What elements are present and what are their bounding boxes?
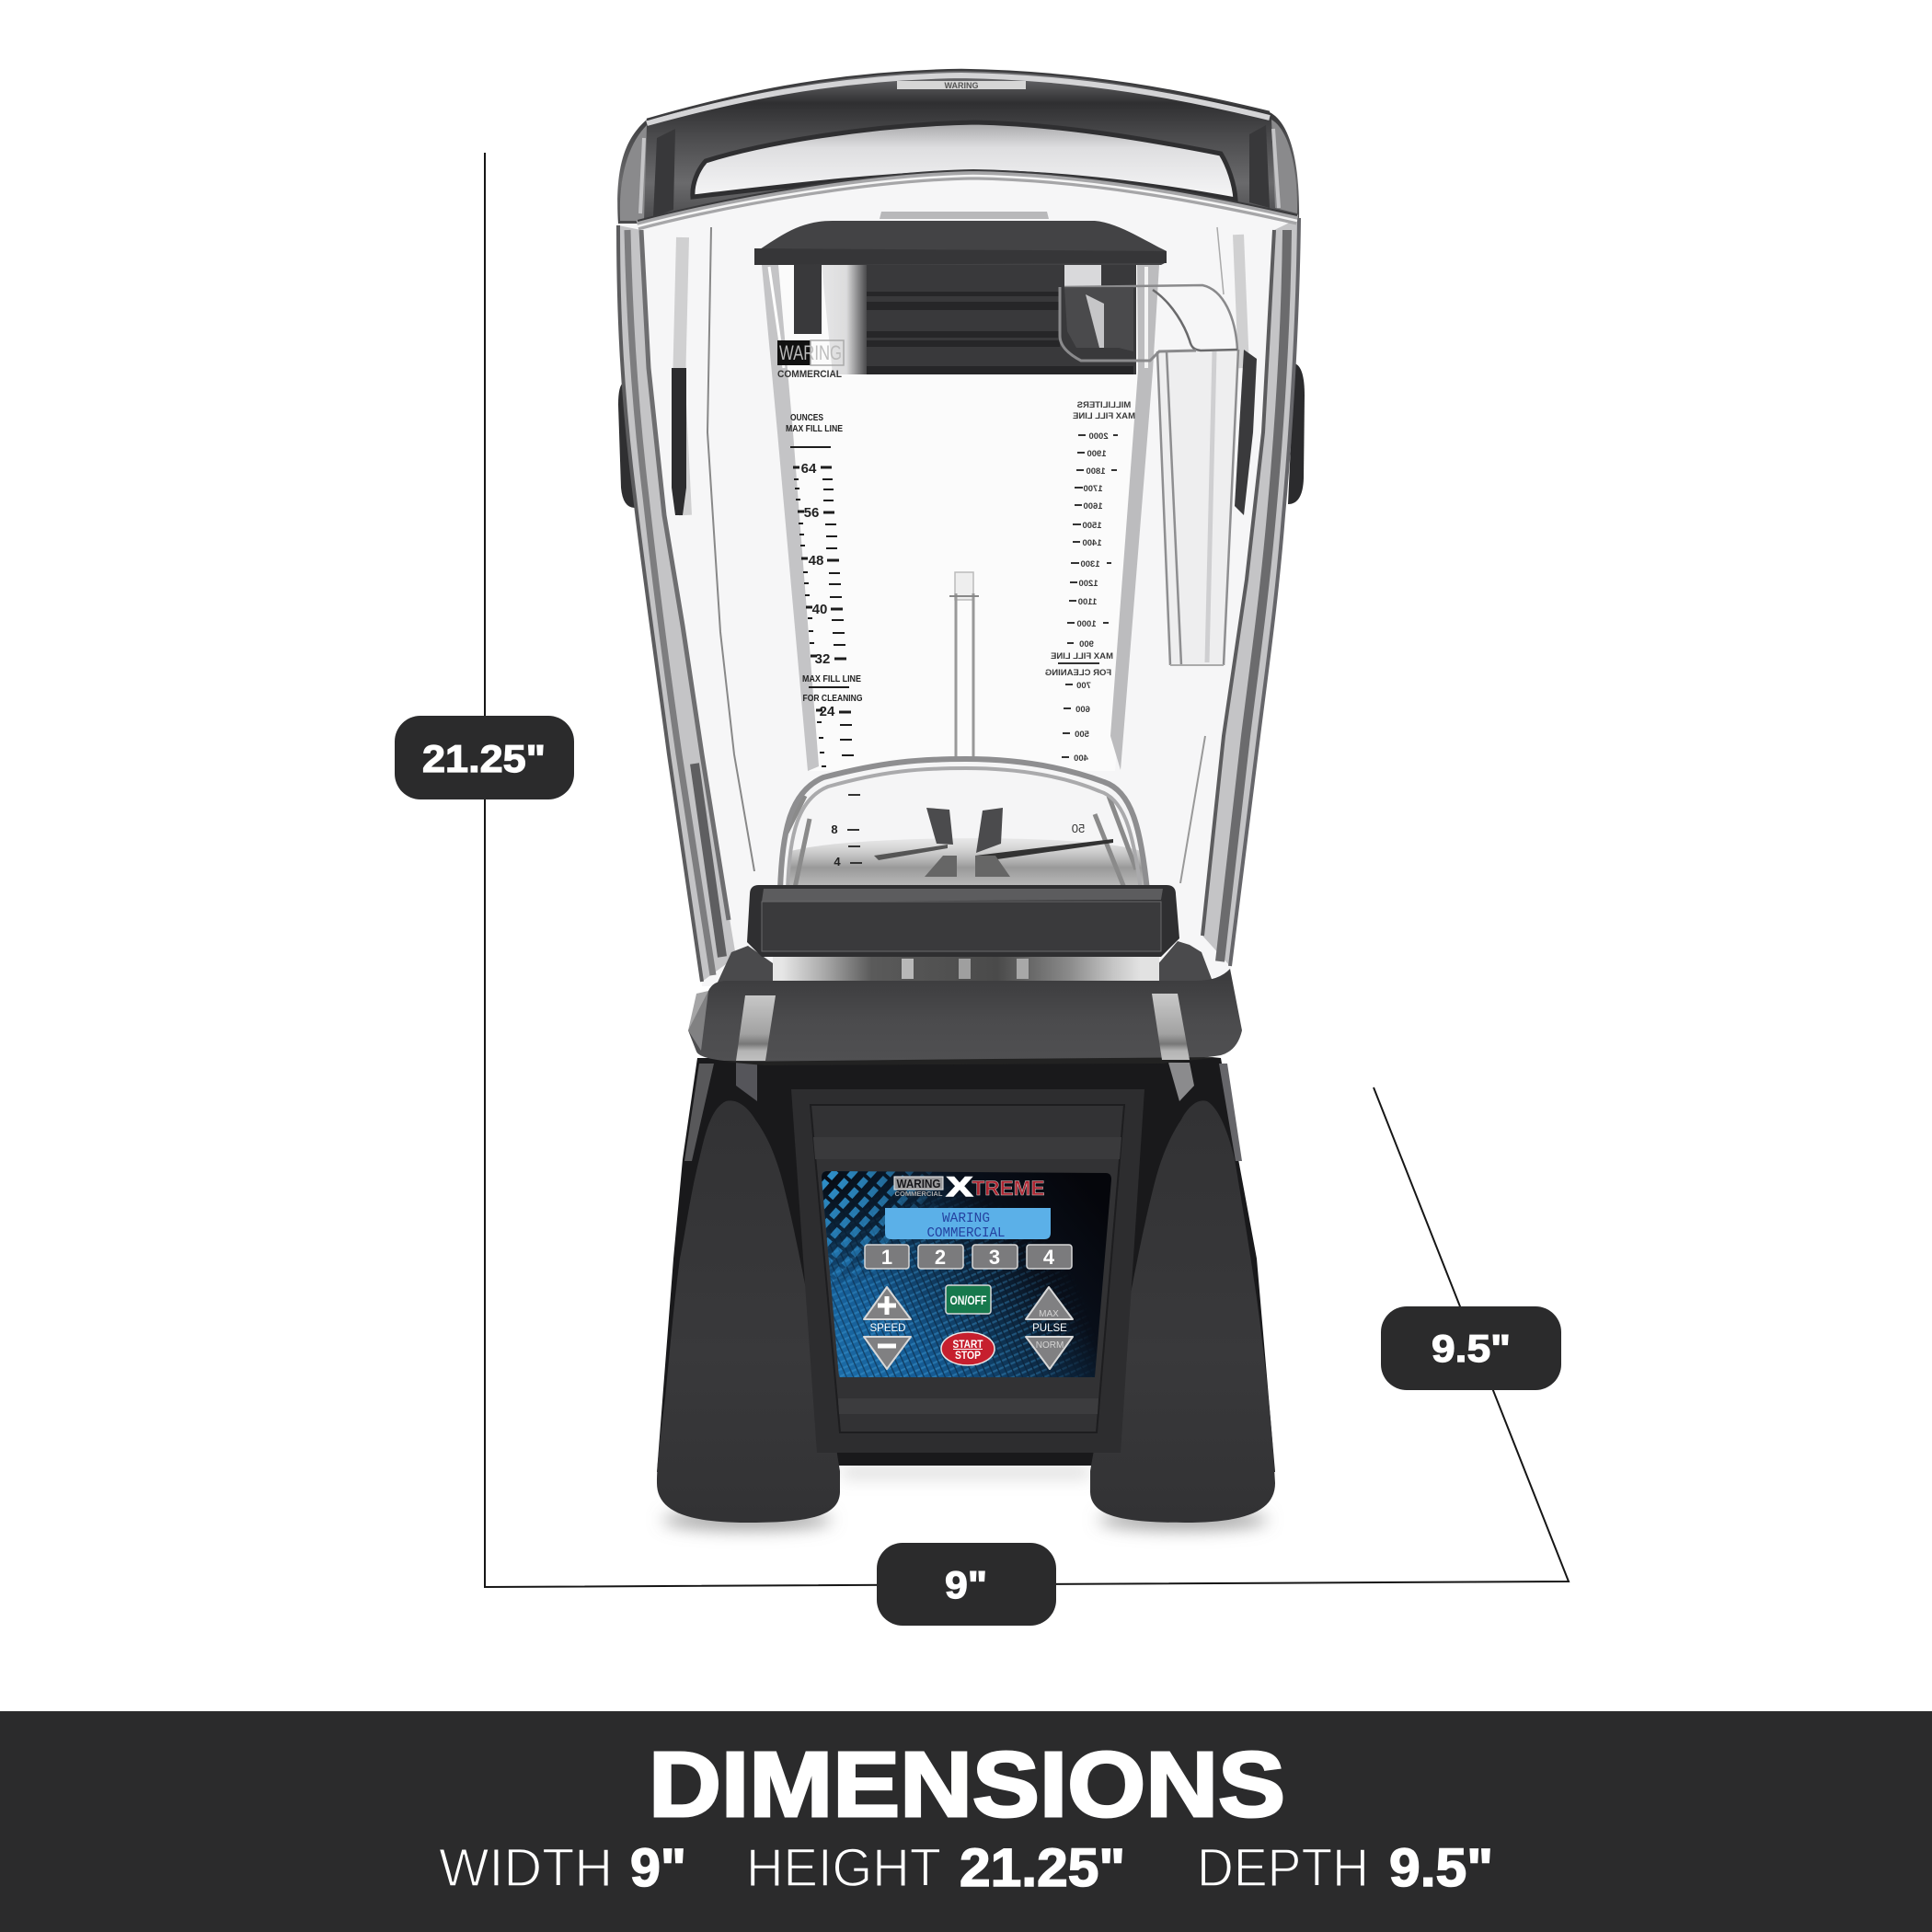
ounces scale: 40 [812,602,827,617]
left foot [657,1100,840,1523]
preset buttons 1 to 4: 4 [1043,1246,1055,1269]
milliliters scale (mirrored, seen through the jar): 1700 [1083,484,1103,494]
milliliters scale (mirrored, seen through the jar): 700 [1076,681,1091,691]
jar base pad [747,885,1179,957]
left side band of shell [618,225,736,982]
brand logo: WARING [896,1177,940,1190]
right bracket in shell [1235,350,1257,515]
side knob left [618,383,635,508]
ounces scale: 64 [801,461,817,477]
milliliters scale (mirrored, seen through the jar): MAX FILL LINE [1073,411,1135,421]
side knob right [1288,363,1305,504]
ounces scale: FOR CLEANING [802,693,863,704]
ounces scale: OUNCES [790,412,823,423]
milliliters scale (mirrored, seen through the jar): 400 [1074,753,1088,764]
lid corner highlights [640,129,1279,213]
milliliters scale (mirrored, seen through the jar): 1300 [1080,559,1100,569]
PULSE controls: MAX [1039,1309,1059,1319]
milliliters scale (mirrored, seen through the jar): MAX FILL LINE [1051,651,1113,661]
milliliters scale (mirrored, seen through the jar): 1500 [1082,521,1102,531]
milliliters scale (mirrored, seen through the jar): 1800 [1086,466,1106,477]
lid rim [638,175,1297,225]
milliliters scale (mirrored, seen through the jar): 600 [1075,705,1090,715]
brand logo: COMMERCIAL [894,1191,943,1198]
enclosure lid with window [617,70,1299,226]
preset buttons 1 to 4: 1 [881,1246,892,1269]
width spec: WIDTH [439,1838,613,1898]
SPEED controls [864,1287,911,1369]
blending enclosure: clear outer shell [616,70,1305,986]
ounces scale: 24 [820,704,835,719]
lid window [693,122,1236,200]
blade shaft [949,572,979,883]
LCD display [885,1208,1051,1241]
height label pill [395,716,574,799]
milliliters scale (mirrored, seen through the jar): 500 [1075,730,1089,740]
height spec: HEIGHT [746,1838,941,1898]
ounces scale [786,412,863,719]
blender jar [754,212,1238,891]
black base body [657,1058,1275,1523]
milliliters scale (mirrored, seen through the jar): MILLILITERS [1077,400,1131,410]
milliliters scale (mirrored, seen through the jar): 1900 [1087,449,1107,459]
gap below jar pad [773,952,1159,982]
dark wedge left of jar pad [716,946,791,986]
lid label plate [897,81,1026,89]
depth label pill [1381,1306,1561,1390]
ounces scale: MAX FILL LINE [802,673,861,684]
width label pill [877,1543,1056,1626]
brand logo: X [947,1172,972,1202]
brand logo [894,1172,1045,1202]
milliliters scale (mirrored, seen through the jar): FOR CLEANING [1045,668,1111,678]
dimension lines: height, width and depth [485,153,1569,1587]
metric mark at jar base: 50 [1072,822,1085,835]
height label pill: 21.25" [422,737,546,780]
depth spec: 9.5" [1389,1838,1493,1898]
inner reflection strips left [679,237,685,515]
control touchpad [810,1168,1122,1380]
LCD display: COMMERCIAL [927,1225,1005,1241]
ON/OFF button [946,1285,991,1314]
SPEED controls: SPEED [870,1323,905,1334]
depth spec [1197,1838,1493,1898]
left bracket in shell [672,368,686,515]
height spec [746,1838,1125,1898]
pad artwork [810,1168,1122,1380]
jar body glass [762,265,1157,771]
jar branding: COMMERCIAL [777,369,842,380]
milliliters scale (mirrored, seen through the jar): 1100 [1078,597,1097,607]
lid corner shading [620,120,1297,221]
ounces scale: MAX FILL LINE [786,423,843,434]
ON/OFF button: ON/OFF [949,1294,986,1307]
control panel housing [791,1089,1144,1453]
ounce marks at jar base: 8 [831,822,838,836]
enclosure lid with window: WARING [944,81,979,90]
jar lid [880,212,1049,219]
milliliters scale (mirrored, seen through the jar): 2000 [1088,431,1109,442]
milliliters scale (mirrored, seen through the jar): 1200 [1078,579,1098,589]
floor shadows under feet [662,1466,1268,1530]
preset buttons 1 to 4 [865,1245,1072,1269]
depth spec: DEPTH [1197,1838,1369,1898]
jar branding [777,340,844,380]
ounce marks at jar base [831,822,841,868]
preset buttons 1 to 4: 3 [989,1246,1000,1269]
measuring cap handle [1060,285,1238,665]
jar base with rounded shoulder [780,759,1147,891]
collar [688,969,1242,1065]
height spec: 21.25" [960,1838,1125,1898]
START STOP button: STOP [955,1351,981,1362]
width label pill: 9" [945,1563,987,1606]
ounces scale: 32 [815,651,830,667]
dark wedge right of jar pad [1134,941,1214,986]
ounce marks at jar base: 4 [834,855,841,868]
right foot [1090,1100,1275,1523]
START STOP button: START [953,1340,983,1351]
milliliters scale (mirrored, seen through the jar) [1045,400,1135,764]
milliliters scale (mirrored, seen through the jar): 1400 [1082,538,1102,548]
preset buttons 1 to 4: 2 [935,1246,946,1269]
jar branding: WARING [779,341,842,364]
LCD display: WARING [942,1211,990,1226]
ounces scale: 48 [809,553,823,569]
ounces tick marks [790,447,854,766]
PULSE controls [1026,1287,1073,1369]
jar left wall [762,265,819,771]
plunger ribs [867,292,1133,374]
milliliters tick marks [1058,435,1118,757]
PULSE controls: NORM [1036,1340,1064,1351]
right side band of shell [1202,218,1299,966]
depth label pill: 9.5" [1432,1327,1511,1370]
ounces scale: 56 [804,505,819,521]
dark inner plunger [794,265,1136,374]
blades [874,808,1113,877]
bottom banner [0,1711,1932,1932]
milliliters scale (mirrored, seen through the jar): 1000 [1076,619,1097,629]
banner heading: DIMENSIONS [649,1733,1285,1836]
blender photo illustration [616,70,1305,1530]
PULSE controls: PULSE [1032,1323,1067,1334]
milliliters scale (mirrored, seen through the jar): 900 [1079,639,1094,650]
milliliters scale (mirrored, seen through the jar): 1600 [1083,501,1103,512]
width spec: 9" [630,1838,686,1898]
START STOP button [941,1332,995,1365]
brand logo: TREME [972,1177,1045,1200]
jar right wall [1110,265,1159,770]
